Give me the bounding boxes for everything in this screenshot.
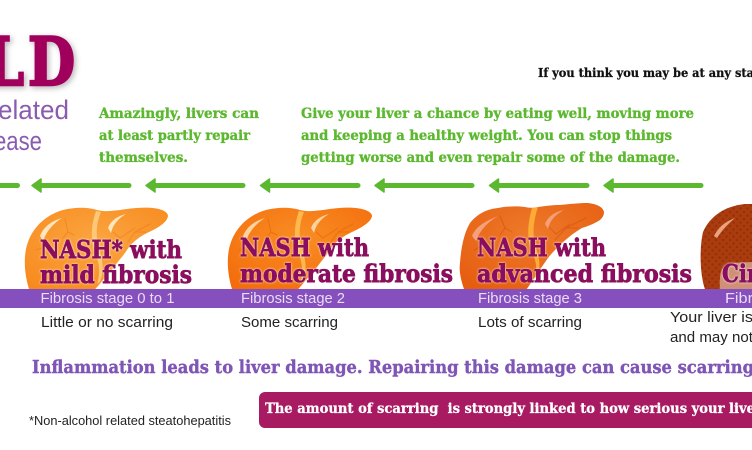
panel: cirrhosis <box>670 259 752 346</box>
stage label: Fibrosis stage 3 <box>478 291 582 307</box>
arrows pointing left <box>0 179 701 192</box>
heading: NASH with <box>240 233 369 262</box>
text block: livers can repair <box>98 106 259 166</box>
heading: NASH* with <box>40 235 182 264</box>
icon: liver advanced fibrosis <box>460 203 604 292</box>
text block: give your liver a chance <box>301 106 694 166</box>
description: Little or no scarring <box>41 315 173 331</box>
description: Some scarring <box>241 315 338 331</box>
icon: liver cirrhosis <box>701 204 752 292</box>
title <box>0 23 75 101</box>
stage label: Fibr <box>725 291 752 307</box>
panel: NASH with mild fibrosis <box>40 235 192 331</box>
text block: give your liver a chance: and keeping a healthy weight. You can stop things <box>301 128 672 144</box>
description <box>670 310 752 346</box>
heading: advanced fibrosis <box>477 259 692 288</box>
heading <box>40 235 192 289</box>
text block: livers can repair: at least partly repair <box>99 128 251 144</box>
heading: NASH with <box>477 233 606 262</box>
title: D <box>28 23 75 101</box>
icon: liver mild fibrosis <box>25 208 168 292</box>
icon: liver moderate fibrosis <box>228 208 372 292</box>
text block: give your liver a chance: getting worse and even repair some of the damage. <box>301 150 680 166</box>
callout: scarring and seriousness <box>259 392 752 428</box>
subtitle: elated <box>0 95 69 125</box>
heading <box>477 233 692 288</box>
description: Your liver is <box>670 310 752 326</box>
description: Lots of scarring <box>478 315 582 331</box>
bar: fibrosis stages <box>0 289 752 308</box>
stage label: Fibrosis stage 0 to 1 <box>40 291 174 307</box>
text block: livers can repair: themselves. <box>99 150 188 166</box>
stage label: Fibrosis stage 2 <box>241 291 345 307</box>
footnote: *Non-alcohol related steatohepatitis <box>29 413 231 428</box>
description: and may not <box>670 330 752 346</box>
heading <box>240 233 453 288</box>
heading: mild fibrosis <box>40 260 192 289</box>
heading: moderate fibrosis <box>240 259 453 288</box>
text block: livers can repair: Amazingly, livers can <box>98 106 259 122</box>
subtitle <box>0 95 69 156</box>
text block: give your liver a chance: Give your liver a chance by eating well, moving more <box>301 106 694 122</box>
panel: NASH with moderate fibrosis <box>240 233 453 331</box>
panel: NASH with advanced fibrosis <box>477 233 692 331</box>
